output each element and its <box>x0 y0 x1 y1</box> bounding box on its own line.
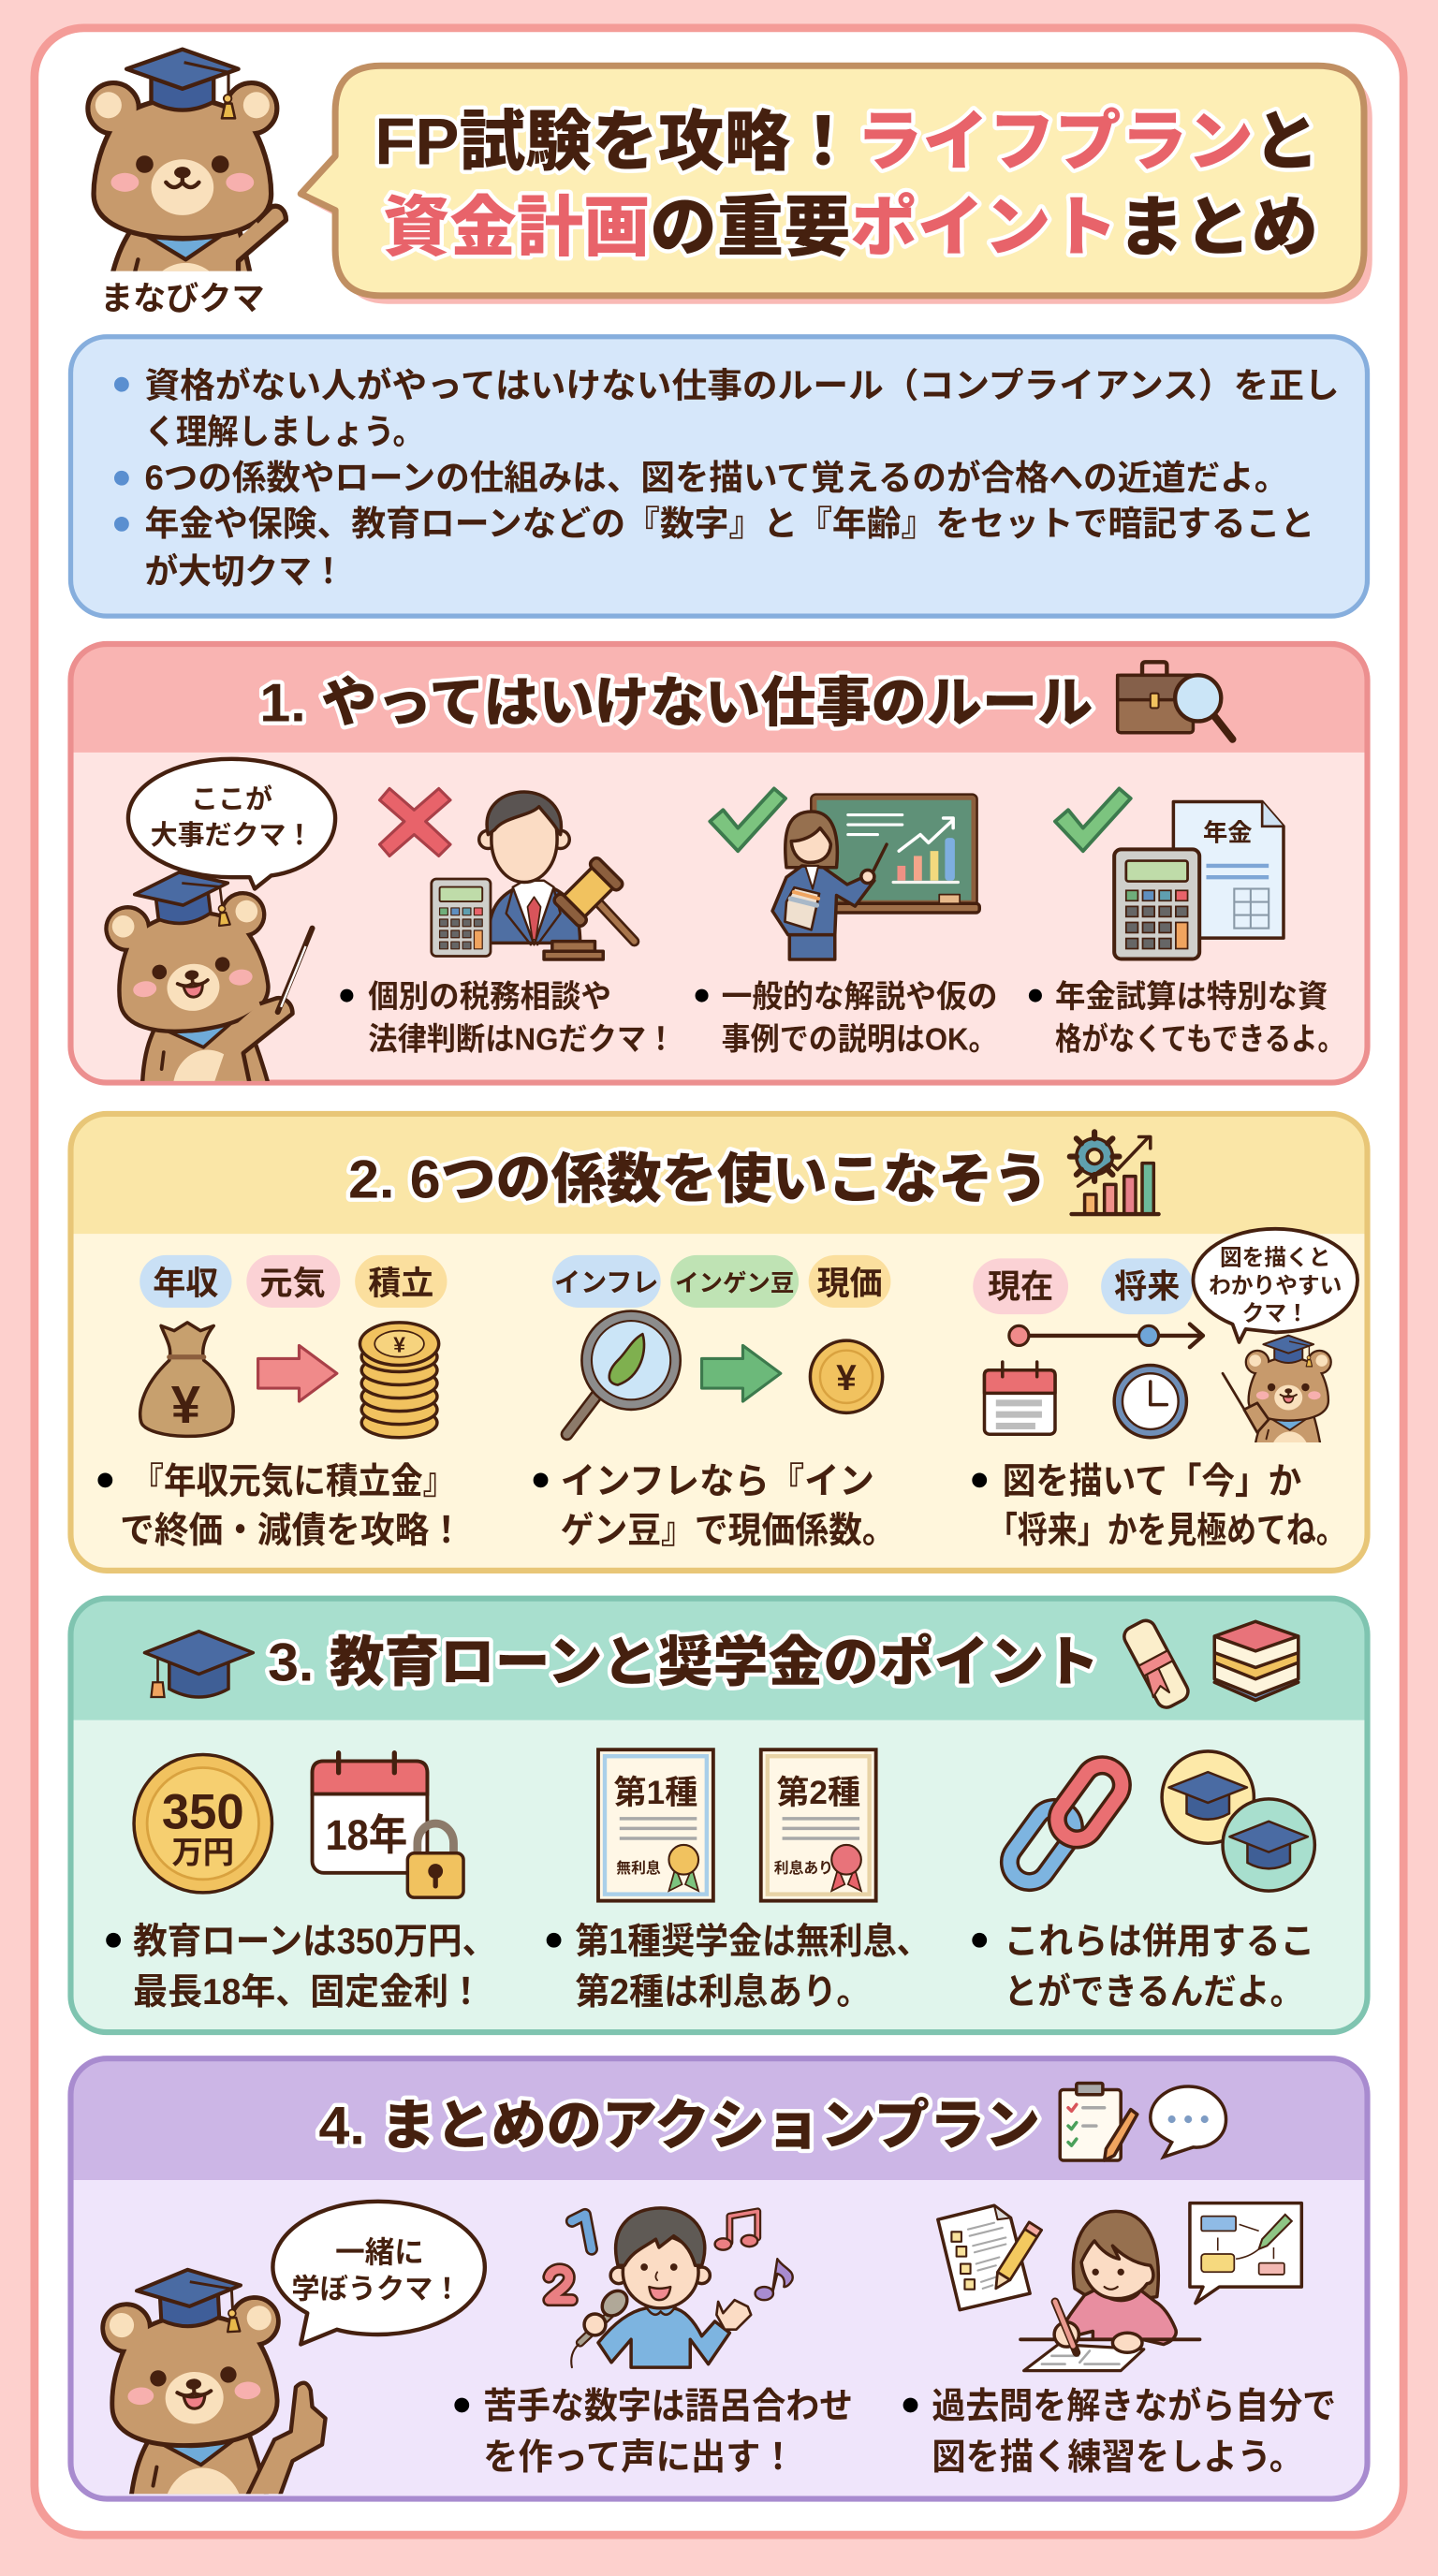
panel 1: rules <box>67 640 1371 1086</box>
point text 2: 過去問を解きながら自分で <box>932 2387 1336 2427</box>
icon: padlock <box>407 1823 463 1897</box>
speech bubble: drawing is easy: クマ！ <box>1242 1301 1309 1326</box>
icon: check 2 <box>1055 788 1131 851</box>
icon: red cross <box>380 788 450 856</box>
pills: 現在 将来: 現在 <box>988 1269 1053 1306</box>
arrow: green <box>702 1345 781 1401</box>
summary text: 年金や保険、教育ローンなどの『数字』と『年齢』をセットで暗記すること <box>144 505 1314 543</box>
summary text: 資格がない人がやってはいけない仕事のルール（コンプライアンス）を正し <box>144 367 1340 405</box>
icon: money bag: ¥ <box>171 1375 200 1434</box>
mascot thumbs up <box>100 2267 328 2494</box>
pills: 年収 元気 積立 <box>139 1255 447 1308</box>
heading 2: 2. 6つの係数を使いこなそう <box>348 1149 1049 1209</box>
point text 3 <box>972 1922 1314 2012</box>
pills: 年収 元気 積立: 元気 <box>259 1266 326 1302</box>
icon: gear and rising chart <box>1070 1132 1159 1214</box>
speech bubble: here is important <box>128 759 335 889</box>
certificate: 第1種: 第1種 <box>614 1775 697 1811</box>
pills: インフレ インゲン豆 現価: インゲン豆 <box>675 1271 794 1297</box>
pointer stick <box>278 929 313 1012</box>
speech bubble: drawing is easy: 図を描くと <box>1220 1245 1330 1270</box>
point text 2: 第1種奨学金は無利息、 <box>575 1922 931 1962</box>
icon: pension document and calculator <box>1114 801 1284 959</box>
panel 3: education loans <box>70 1599 1368 2032</box>
icon: checklist and pencil <box>938 2205 1042 2310</box>
icon: boy singing <box>571 2208 751 2367</box>
point text 3: 年金試算は特別な資 <box>1055 980 1328 1015</box>
pills: 現在 将来: 将来 <box>1114 1269 1180 1306</box>
point text 3: とができるんだよ。 <box>1005 1972 1303 2012</box>
icon: diploma <box>1120 1617 1192 1712</box>
certificate: 第2種: 利息あり <box>774 1859 833 1877</box>
point text 2: ゲン豆』で現価係数。 <box>561 1511 896 1551</box>
point text 2: 第2種は利息あり。 <box>575 1972 871 2012</box>
panel 4: action plan <box>67 2056 1371 2502</box>
heading 1: 1. やってはいけない仕事のルール <box>259 673 1093 733</box>
point text 1 <box>454 2387 853 2478</box>
summary panel <box>70 337 1368 616</box>
mascot: manabi kuma <box>85 47 288 313</box>
summary text: く理解しましょう。 <box>144 413 424 451</box>
icon: 18 year calendar: 18年 <box>326 1811 407 1859</box>
point text 1: 最長18年、固定金利！ <box>133 1972 483 2012</box>
icon: diagram bubble <box>1190 2203 1301 2304</box>
point text 2 <box>534 1461 896 1551</box>
icon: yen coin: ¥ <box>836 1358 857 1398</box>
title line 2: 資金計画の重要ポイントまとめ <box>383 190 1318 264</box>
point text 1 <box>340 980 675 1058</box>
icon: money bag <box>140 1323 233 1436</box>
pills: 年収 元気 積立: 積立 <box>368 1266 433 1302</box>
summary bullets <box>114 377 129 532</box>
certificate: 第1種: 無利息 <box>616 1859 661 1877</box>
icon: graduation cap <box>144 1632 253 1697</box>
heading 3: 3. 教育ローンと奨学金のポイント <box>268 1632 1099 1692</box>
speech bubble: here is important: 大事だクマ！ <box>151 821 313 851</box>
point text 2 <box>696 980 998 1058</box>
point text 3: 図を描いて「今」か <box>1003 1461 1301 1501</box>
title bubble <box>301 66 1372 304</box>
point text 2: 一般的な解説や仮の <box>722 980 998 1015</box>
point text 2: 事例での説明はOK。 <box>722 1023 998 1058</box>
mascot name: まなびクマ <box>100 281 265 317</box>
summary text <box>144 367 1340 591</box>
icon: yen coin <box>810 1340 883 1412</box>
heading 4: 4. まとめのアクションプラン <box>319 2096 1040 2156</box>
pills: インフレ インゲン豆 現価: インフレ <box>554 1268 659 1297</box>
mascot small <box>1221 1335 1332 1442</box>
speech bubble: learn together: 一緒に <box>335 2235 424 2269</box>
point text 2: 図を描く練習をしよう。 <box>932 2437 1303 2478</box>
speech bubble: learn together: 学ぼうクマ！ <box>291 2273 462 2305</box>
timeline <box>1009 1325 1203 1347</box>
point text 1 <box>97 1461 463 1551</box>
point text 3: これらは併用するこ <box>1005 1922 1314 1962</box>
certificate: 第2種 <box>761 1749 876 1901</box>
icon: books <box>1214 1621 1299 1701</box>
icon: clock <box>1114 1365 1186 1438</box>
pills: インフレ インゲン豆 現価: 現価 <box>816 1266 883 1302</box>
point text 1: 個別の税務相談や <box>368 980 611 1015</box>
speech bubble: drawing is easy: わかりやすい <box>1209 1273 1342 1298</box>
point text 3 <box>1029 980 1344 1058</box>
summary text: が大切クマ！ <box>144 552 345 591</box>
icon: check 1 <box>710 788 785 851</box>
point text 1: 『年収元気に積立金』 <box>131 1461 455 1501</box>
point text 1 <box>106 1922 496 2012</box>
pills: 年収 元気 積立: 年収 <box>153 1266 218 1302</box>
icon: speech with dots <box>1151 2086 1226 2157</box>
icon: girl studying <box>1020 2211 1199 2371</box>
icon: coin stack: ¥ <box>393 1332 405 1356</box>
title line 1: FP試験を攻略！ライフプランと <box>374 105 1320 179</box>
arrow: pink <box>258 1345 337 1401</box>
icon: magnifier with green bean <box>567 1311 681 1434</box>
icon: teacher at blackboard <box>772 795 979 959</box>
point text 1: 教育ローンは350万円、 <box>133 1922 496 1962</box>
icon: briefcase and magnifier <box>1118 662 1233 739</box>
point text 1: で終価・減債を攻略！ <box>120 1511 463 1551</box>
speech bubble: learn together <box>272 2202 485 2345</box>
point text 2 <box>903 2387 1336 2478</box>
icon: pension document and calculator: 年金 <box>1203 819 1253 847</box>
point text 1: を作って声に出す！ <box>483 2437 796 2478</box>
summary text: 6つの係数やローンの仕組みは、図を描いて覚えるのが合格への近道だよ。 <box>144 459 1288 497</box>
icon: 350万円 coin <box>134 1754 272 1893</box>
point text 2: インフレなら『イン <box>561 1461 874 1501</box>
point text 1: 法律判断はNGだクマ！ <box>368 1023 675 1058</box>
point text 3 <box>972 1461 1346 1551</box>
panel 2: six coefficients <box>70 1114 1368 1571</box>
icon: chain links <box>1002 1757 1130 1890</box>
icon: calendar <box>985 1362 1055 1434</box>
numbers and notes <box>549 2211 793 2300</box>
icon: 350万円 coin: 万円 <box>171 1836 234 1870</box>
certificate: 第2種: 第2種 <box>776 1775 860 1811</box>
icon: 350万円 coin: 350 <box>162 1784 244 1839</box>
speech bubble: here is important: ここが <box>191 784 272 815</box>
certificate: 第1種 <box>598 1749 713 1901</box>
mascot pointing <box>104 871 315 1081</box>
icon: two caps in circles <box>1162 1751 1314 1891</box>
pills: 現在 将来 <box>973 1258 1193 1314</box>
pills: インフレ インゲン豆 現価 <box>552 1255 890 1308</box>
icon: man in suit with calculator and gavel <box>432 792 635 959</box>
point text 3: 「将来」かを見極めてね。 <box>988 1511 1346 1551</box>
point text 3: 格がなくてもできるよ。 <box>1055 1022 1344 1058</box>
speech bubble: drawing is easy <box>1193 1229 1357 1342</box>
point text 2 <box>547 1922 931 2012</box>
icon: 18 year calendar <box>313 1753 427 1873</box>
point text 1: 苦手な数字は語呂合わせ <box>483 2387 853 2427</box>
icon: clipboard and pencil <box>1060 2083 1137 2160</box>
icon: coin stack <box>360 1323 439 1438</box>
